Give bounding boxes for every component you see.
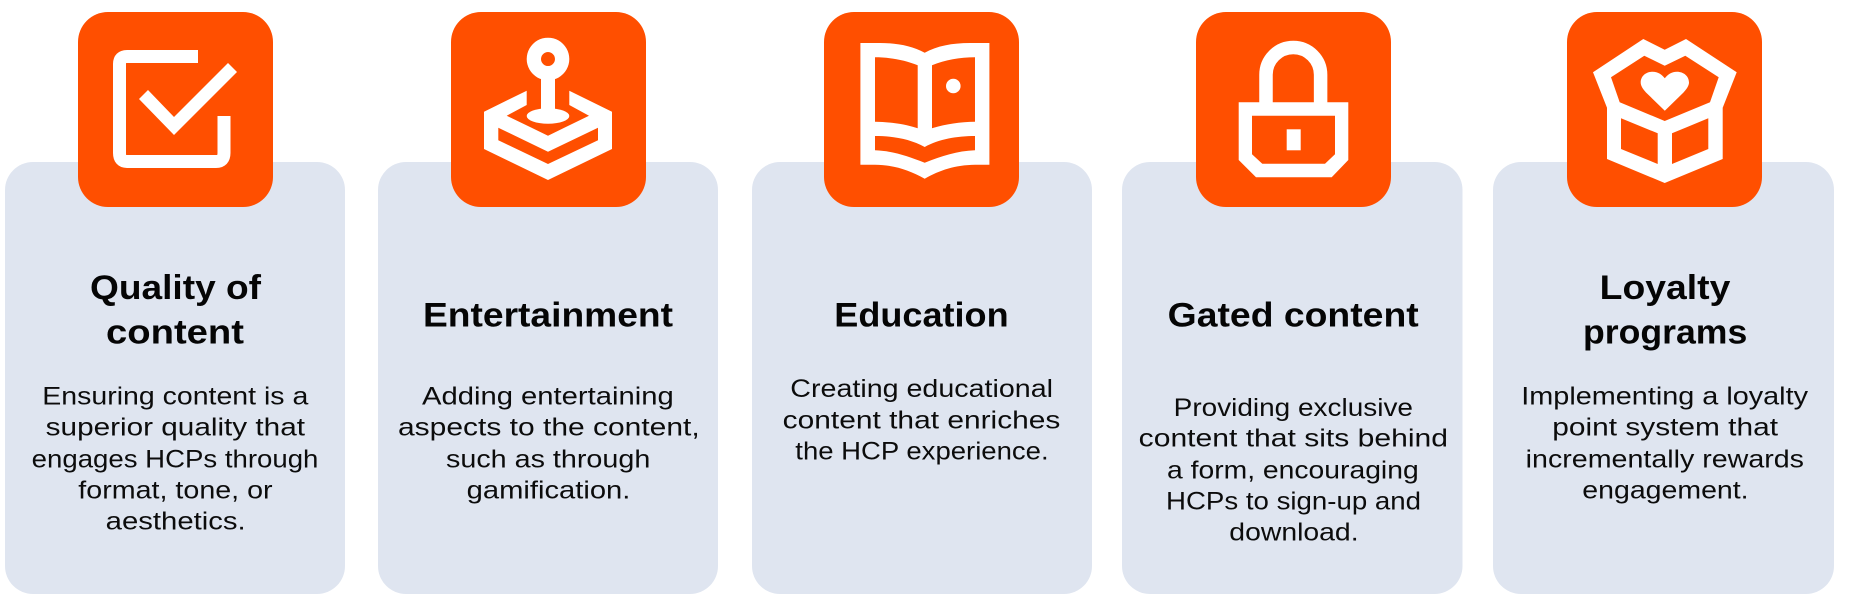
panel: entertainment (378, 12, 718, 594)
heading: Quality of (90, 269, 262, 307)
description (1521, 383, 1809, 505)
heading: Entertainment (423, 297, 673, 335)
icon tile: padlock (1196, 12, 1391, 207)
description: Ensuring content is a (42, 383, 308, 411)
description: Providing exclusive (1174, 394, 1413, 422)
card background (1122, 162, 1462, 594)
description: gamification. (467, 477, 630, 505)
heading: content (106, 314, 244, 352)
panel: education (752, 12, 1092, 594)
description: point system that (1552, 414, 1778, 442)
description: superior quality that (46, 414, 305, 442)
description: Creating educational (790, 375, 1053, 403)
description: aspects to the content, (398, 414, 700, 442)
description: HCPs to sign-up and (1166, 488, 1421, 516)
heading (1583, 269, 1747, 352)
panel: loyalty programs (1493, 12, 1834, 594)
card background (5, 162, 345, 594)
description (398, 383, 700, 505)
description: download. (1229, 519, 1359, 547)
description: a form, encouraging (1167, 456, 1419, 484)
panel: quality of content (5, 12, 345, 594)
card background (752, 162, 1092, 594)
description (1139, 394, 1448, 547)
description: aesthetics. (106, 508, 246, 536)
description: engagement. (1582, 477, 1749, 505)
heading: programs (1583, 314, 1747, 352)
description: Adding entertaining (422, 383, 674, 411)
panel: gated content (1122, 12, 1462, 594)
heading: Education (834, 297, 1009, 335)
description (32, 383, 318, 536)
icon tile: open book (824, 12, 1019, 207)
description: such as through (446, 445, 650, 473)
description: Implementing a loyalty (1521, 383, 1809, 411)
description (783, 375, 1060, 466)
icon tile: checkbox (78, 12, 273, 207)
heading: Loyalty (1600, 269, 1730, 307)
heading: Gated content (1168, 297, 1419, 335)
card background (1493, 162, 1834, 594)
card background (378, 162, 718, 594)
description: engages HCPs through (32, 445, 318, 473)
heading (90, 269, 262, 352)
icon tile: gift box with heart (1567, 12, 1762, 207)
description: content that sits behind (1139, 425, 1448, 453)
description: incrementally rewards (1526, 445, 1804, 473)
icon tile: joystick (451, 12, 646, 207)
description: the HCP experience. (795, 438, 1049, 466)
description: content that enriches (783, 406, 1060, 434)
description: format, tone, or (78, 477, 273, 505)
